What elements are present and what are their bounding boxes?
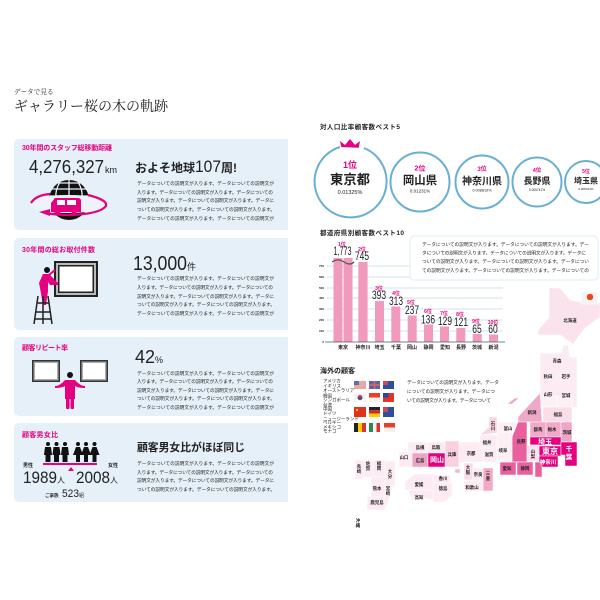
prefecture labels: 岩手 xyxy=(562,373,571,380)
text block: overseas xyxy=(407,379,499,404)
prefecture labels: 崎 xyxy=(386,490,391,496)
bar chart: best 10 prefectures: 岡山 xyxy=(407,344,417,351)
bar chart: best 10 prefectures: 400 xyxy=(319,296,324,300)
region: Hokkaido xyxy=(538,288,600,344)
title: ギャラリー桜の木の軌跡 xyxy=(14,98,169,115)
list: countries: シンガポール xyxy=(323,396,350,404)
label: male: 男性 xyxy=(23,462,33,469)
prefecture labels: 埼玉 xyxy=(538,437,552,446)
prefecture labels: 長 xyxy=(357,464,362,470)
prefecture labels: 和歌山 xyxy=(465,484,479,491)
prefecture labels: 静岡 xyxy=(521,465,530,472)
circle: rank 2: 2位 xyxy=(415,164,425,172)
panel: total installations xyxy=(14,232,308,336)
number: families: 523 xyxy=(62,488,79,500)
bar chart: best 10 prefectures: 0 xyxy=(322,340,324,344)
prefecture labels: 富山 xyxy=(504,425,512,432)
bar chart: best 10 prefectures: 静岡 xyxy=(423,344,434,351)
callout: around the earth xyxy=(135,157,237,176)
circle: rank 1: 東京都 xyxy=(330,171,370,187)
text block: gender: 入ります。データについての説明文が入ります。データについての xyxy=(137,469,273,476)
prefecture labels: 兵庫 xyxy=(448,451,457,458)
bar chart: best 10 prefectures: 121 xyxy=(454,315,468,329)
prefecture labels: 群馬 xyxy=(534,426,543,433)
list: countries: イギリス xyxy=(323,384,341,388)
text block: overseas: データについての説明文が入ります。データ xyxy=(407,379,499,386)
number: families: ご家族 xyxy=(45,492,59,499)
text block: repeat: ついての説明文が入ります。データについての説明文が入ります。 xyxy=(137,395,275,402)
prefecture labels: 香川 xyxy=(439,475,447,482)
prefecture labels: 大 xyxy=(466,464,471,471)
prefecture labels: 宮城 xyxy=(562,392,571,399)
icon: picture frame and worker on ladder xyxy=(34,261,98,324)
panel: staff travel distance xyxy=(14,130,308,240)
number: families: 組 xyxy=(79,492,84,499)
title: データで見る xyxy=(14,87,54,96)
bar chart: best 10 prefectures: 神奈川 xyxy=(355,344,371,351)
icon: Japan flag xyxy=(581,292,598,304)
region: Chubu and Kanto xyxy=(518,393,542,422)
text block: travel: 入ります。データについての説明文が入ります。データについての xyxy=(137,189,273,196)
prefecture labels: 秋田 xyxy=(544,373,553,380)
text block: travel: データについての説明文が入ります。データについての説明文が xyxy=(137,180,274,187)
bar chart: best 10 prefectures: 136 xyxy=(421,312,435,326)
text block: travel xyxy=(137,180,275,222)
prefecture labels: 神奈川 xyxy=(540,458,556,466)
text block: travel: データについての説明文が入ります。データについての説明文が xyxy=(137,215,274,222)
number: men: 人 xyxy=(57,476,65,485)
panel: overseas customers xyxy=(320,366,499,434)
text block: installations: データについての説明文が入ります。データについての説明文が xyxy=(137,275,274,282)
icon: person between two frames xyxy=(32,360,108,409)
prefecture labels: 青森 xyxy=(553,358,562,364)
bar chart: best 10 prefectures: 745 xyxy=(355,249,369,263)
number: installations: 13,000 xyxy=(133,253,187,275)
prefecture labels: 縄 xyxy=(356,522,361,529)
list: countries: メキシコ xyxy=(323,424,341,430)
icon: globe with car xyxy=(30,180,106,220)
circle: rank 4: 0.005741% xyxy=(529,188,545,192)
text block: travel: ついての説明文が入ります。データについての説明文が入ります。 xyxy=(137,206,275,213)
flags xyxy=(354,381,395,432)
text block: repeat: 入ります。データについての説明文が入ります。データについての xyxy=(137,378,273,385)
text block: repeat xyxy=(137,370,275,411)
text block: overseas: いての説明文が入ります。データについて xyxy=(407,397,491,404)
prefecture labels: 福島 xyxy=(554,411,563,418)
region: Tohoku xyxy=(540,345,577,407)
bar chart: best 10 prefectures: 茨城 xyxy=(472,344,482,351)
prefecture labels: 佐 xyxy=(366,460,371,467)
prefecture labels: 重 xyxy=(486,475,491,482)
text block: installations: 説明文が入ります。データについての説明文が入ります。データに xyxy=(137,293,274,300)
prefecture labels: 崎 xyxy=(357,468,362,474)
callout: description box: ての説明文が入ります。データについての説明文が入ります。データについての xyxy=(422,267,589,274)
text block: overseas: についての説明文が入ります。データにつ xyxy=(407,388,495,395)
unit: ken: 件 xyxy=(187,261,196,272)
list: countries: ドイツ xyxy=(323,411,337,416)
bar chart: best 10 prefectures: 5位 xyxy=(407,299,415,306)
callout: around the earth: 周! xyxy=(221,161,237,175)
bar chart: best 10 prefectures: 東京 xyxy=(338,344,348,351)
text block: repeat: 説明文が入ります。データについての説明文が入ります。データに xyxy=(137,387,274,394)
callout: description box xyxy=(410,236,598,280)
text block: repeat: データについての説明文が入ります。データについての説明文が xyxy=(137,404,274,411)
bar chart: best 10 prefectures: 千葉 xyxy=(391,344,401,351)
prefecture labels: 三 xyxy=(486,471,491,476)
circle: rank 1 xyxy=(315,147,387,217)
region: Chugoku xyxy=(408,442,445,453)
text block: gender: ついての説明文が入ります。データについての説明文が入ります。 xyxy=(137,486,275,493)
callout: around the earth: 107 xyxy=(195,157,221,176)
bar chart: best 10 prefectures: 10位 xyxy=(488,319,498,326)
circle: rank 4 xyxy=(512,158,562,206)
bar chart: best 10 prefectures: 237 xyxy=(405,303,419,317)
prefecture labels: 岡山 xyxy=(430,456,444,464)
heading: travel distance: 30年間のスタッフ総移動距離 xyxy=(22,143,112,152)
icon: crown xyxy=(340,139,360,151)
prefecture labels: 高知 xyxy=(415,494,424,501)
bar chart: best 10 prefectures: 4位 xyxy=(392,290,400,297)
panel: best 5 per capita xyxy=(315,122,600,217)
list: countries: 台湾 xyxy=(323,402,332,408)
circle: rank 5: 0.005431% xyxy=(578,187,594,191)
bar chart: best 10 prefectures: 3位 xyxy=(375,285,383,292)
prefecture labels: 茨城 xyxy=(563,429,572,436)
prefecture labels: 岡 xyxy=(377,466,382,471)
circle: rank 1: 0.01325% xyxy=(338,190,362,196)
prefecture labels: 石 xyxy=(491,421,496,427)
prefecture labels: 宮 xyxy=(386,485,391,492)
text block: gender: データについての説明文が入ります。データについての説明文が xyxy=(137,460,274,467)
heading: best 5: 対人口比率顧客数ベスト5 xyxy=(320,122,400,131)
prefecture labels: 山形 xyxy=(544,391,553,398)
list: countries: オーストラリア xyxy=(323,388,355,394)
circle: rank 2: 岡山県 xyxy=(403,174,437,187)
number: distance: 4,276,327 xyxy=(29,157,104,177)
unit: km: km xyxy=(105,165,117,175)
prefecture labels: 愛媛 xyxy=(415,481,424,488)
circle: rank 3: 3位 xyxy=(477,165,487,173)
prefecture labels: 川 xyxy=(491,426,495,431)
prefecture labels: 徳島 xyxy=(439,485,448,492)
bar chart: best 10 prefectures: 100 xyxy=(319,329,324,333)
bar chart: best 10 prefectures: 埼玉 xyxy=(374,344,385,351)
bar chart: best 10 prefectures: 600 xyxy=(319,275,324,279)
callout: description box: ついての説明文が入ります。データについての説明文が入ります。データについ xyxy=(422,258,589,265)
bar chart: best 10 prefectures: 9位 xyxy=(472,318,480,325)
bar chart: best 10 prefectures: 300 xyxy=(319,307,324,311)
prefecture labels xyxy=(356,317,577,529)
heading: overseas: 海外の顧客 xyxy=(320,366,355,375)
prefecture labels: 京都 xyxy=(467,450,476,457)
panel: repeat rate xyxy=(14,333,308,421)
circle: rank 2 xyxy=(390,152,450,212)
circle: rank 3: 0.008819% xyxy=(472,188,492,192)
prefecture labels: 千 xyxy=(566,444,573,453)
bar chart: best 10 prefectures: 500 xyxy=(319,286,324,290)
prefecture labels: 大 xyxy=(388,468,393,475)
prefecture labels: 沖 xyxy=(356,517,361,524)
circle: rank 5 xyxy=(565,161,600,203)
list: countries xyxy=(323,378,359,434)
circle: rank 5: 埼玉県 xyxy=(574,176,598,186)
list: countries: アメリカ xyxy=(323,378,341,384)
bar chart: best 10 prefectures: 長野 xyxy=(456,344,466,351)
prefecture labels: 愛知 xyxy=(503,465,512,472)
prefecture labels: 熊本 xyxy=(373,485,382,492)
text block: installations: ついての説明文が入ります。データについての説明文が入ります。 xyxy=(137,301,275,308)
circle: rank 3 xyxy=(456,156,508,208)
circle: rank 2: 0.01231% xyxy=(410,188,430,194)
prefecture labels: 梨 xyxy=(531,453,536,460)
number: women: 2008 xyxy=(76,469,110,487)
callout: nearly equal: 顧客男女比がほぼ同じ xyxy=(137,440,245,454)
unit: percent: % xyxy=(155,355,163,365)
region: Kansai xyxy=(459,442,483,463)
prefecture labels: 広島 xyxy=(416,457,425,464)
text block: repeat: データについての説明文が入ります。データについての説明文が xyxy=(137,370,274,377)
panel: customer gender ratio xyxy=(14,420,308,508)
bar chart: best 10 prefectures: 65 xyxy=(472,322,482,336)
prefecture labels: 分 xyxy=(388,473,393,480)
bar chart: best 10 prefectures: 313 xyxy=(389,294,403,308)
number: families xyxy=(45,488,84,500)
text block: travel: 説明文が入ります。データについての説明文が入ります。データに xyxy=(137,197,274,204)
number: repeat: 42 xyxy=(135,347,155,367)
circle: rank 4: 4位 xyxy=(533,166,542,174)
number: men: 1989 xyxy=(23,469,57,487)
text block: installations: データについての説明文が入ります。データについての説明文が xyxy=(137,310,274,317)
prefecture labels: 福井 xyxy=(483,439,492,446)
callout: description box: データについての説明文が入ります。データについての説明文が入ります。デー xyxy=(422,241,589,248)
bar chart: best 10 prefectures xyxy=(319,228,505,351)
bar chart: best 10 prefectures: 200 xyxy=(319,318,324,322)
circle: rank 1: 1位 xyxy=(343,159,357,170)
list: countries: モナコ xyxy=(323,428,336,434)
map: Japan customer heat map xyxy=(355,288,600,529)
heading: best 10: 都道府県別顧客数ベスト10 xyxy=(320,228,404,237)
prefecture labels: 山口 xyxy=(400,454,408,461)
prefecture labels: 阪 xyxy=(466,469,471,476)
callout: description box: タについての説明文が入ります。データについての説明文が入ります。データに xyxy=(422,250,586,256)
circle: rank 3: 神奈川県 xyxy=(462,174,502,188)
prefecture labels: 鳥取 xyxy=(432,444,441,451)
prefecture labels: 東京 xyxy=(542,446,558,456)
prefecture labels: 山 xyxy=(531,448,535,455)
circle: rank 5: 5位 xyxy=(582,168,590,175)
bar chart: best 10 prefectures: 129 xyxy=(438,314,452,328)
title xyxy=(14,87,169,115)
text block: installations xyxy=(137,275,275,317)
bar chart: best 10 prefectures: 新潟 xyxy=(488,344,499,351)
bar chart: best 10 prefectures: 60 xyxy=(488,322,498,336)
prefecture labels: 奈良 xyxy=(474,471,483,478)
bar chart: best 10 prefectures: 700 xyxy=(319,264,324,268)
prefecture labels: 滋賀 xyxy=(485,451,494,458)
prefecture labels: 島根 xyxy=(416,444,425,451)
region: Shikoku xyxy=(405,474,433,490)
list: countries: ベルギー xyxy=(323,420,341,425)
prefecture labels: 新潟 xyxy=(528,409,537,416)
circle: rank 4: 長野県 xyxy=(523,176,551,186)
prefecture labels: 賀 xyxy=(366,465,371,472)
heading: gender ratio: 顧客男女比 xyxy=(22,430,58,439)
text block: gender xyxy=(137,460,275,493)
prefecture labels: 北海道 xyxy=(563,317,577,324)
heading: repeat rate: 顧客リピート率 xyxy=(22,343,68,352)
bar chart: best 10 prefectures: 7位 xyxy=(440,310,448,317)
bar chart: best 10 prefectures: 愛知 xyxy=(440,344,450,351)
list: countries: 中国 xyxy=(323,406,332,412)
bar chart: best 10 prefectures: 1,773 xyxy=(334,244,352,258)
prefecture labels: 栃木 xyxy=(548,426,557,433)
prefecture labels: 葉 xyxy=(566,452,573,461)
prefecture labels: 福 xyxy=(377,460,382,467)
prefecture labels: 長野 xyxy=(517,438,526,445)
bar chart: best 10 prefectures: 2位 xyxy=(358,246,366,253)
bar chart: best 10 prefectures: 6位 xyxy=(424,308,432,315)
bar chart: best 10 prefectures: 1位 xyxy=(338,241,346,248)
list: countries: 韓国 xyxy=(323,392,332,400)
prefecture labels: 鹿児島 xyxy=(370,499,384,506)
text block: installations: 入ります。データについての説明文が入ります。データについての xyxy=(137,284,273,291)
bar chart: best 10 prefectures: 393 xyxy=(372,288,386,302)
callout: around the earth: およそ地球 xyxy=(135,160,195,175)
prefecture labels: 岐阜 xyxy=(499,447,508,454)
heading: installations: 30年間の総お取付件数 xyxy=(22,245,95,254)
icon: balance with men and women xyxy=(43,442,100,471)
bar chart: best 10 prefectures: 8位 xyxy=(456,311,464,318)
region: Kyushu xyxy=(355,460,364,479)
label: female: 女性 xyxy=(108,462,118,469)
number: women: 人 xyxy=(110,476,118,485)
list: countries: ニュージーランド xyxy=(323,416,359,422)
text block: gender: 説明文が入ります。データについての説明文が入ります。データに xyxy=(137,477,274,484)
